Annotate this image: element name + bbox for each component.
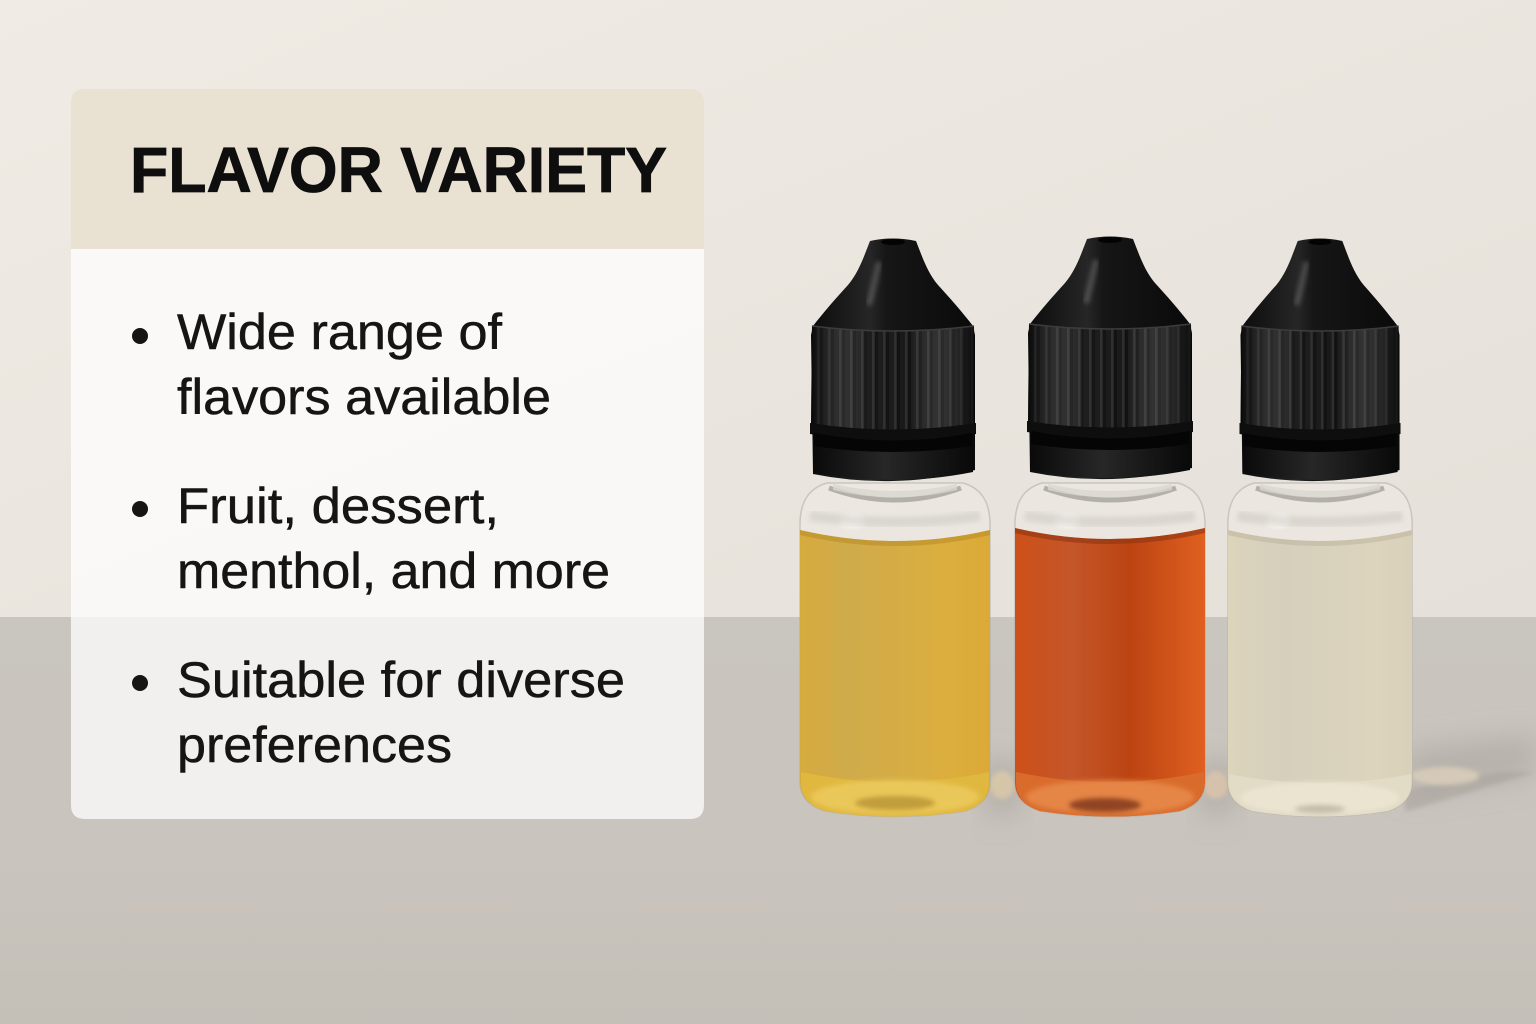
panel header band bbox=[71, 89, 704, 249]
bullet 1: wide range: Wide range of bbox=[177, 304, 502, 360]
background: wall bbox=[0, 0, 1536, 618]
title: FLAVOR VARIETY bbox=[130, 134, 667, 206]
bottle: pale liquid bbox=[1228, 238, 1412, 816]
bullet 3: preferences: Suitable for diverse bbox=[177, 652, 625, 708]
bullet 1: wide range bbox=[132, 304, 551, 425]
background: table surface bbox=[0, 617, 1536, 1024]
bullet 2: flavor types: menthol, and more bbox=[177, 543, 610, 599]
bottle shadows on table bbox=[985, 735, 1536, 815]
bullet 3: preferences: preferences bbox=[177, 717, 452, 773]
bottle: yellow liquid bbox=[800, 238, 990, 816]
bullet 3: preferences bbox=[132, 652, 625, 773]
bullet 1: wide range: flavors available bbox=[177, 369, 551, 425]
bottle: orange liquid bbox=[1015, 236, 1205, 816]
bullet 2: flavor types bbox=[132, 478, 610, 599]
bullet 2: flavor types: Fruit, dessert, bbox=[177, 478, 499, 534]
panel body bbox=[71, 249, 704, 819]
panel: flavor variety card bbox=[71, 89, 704, 819]
